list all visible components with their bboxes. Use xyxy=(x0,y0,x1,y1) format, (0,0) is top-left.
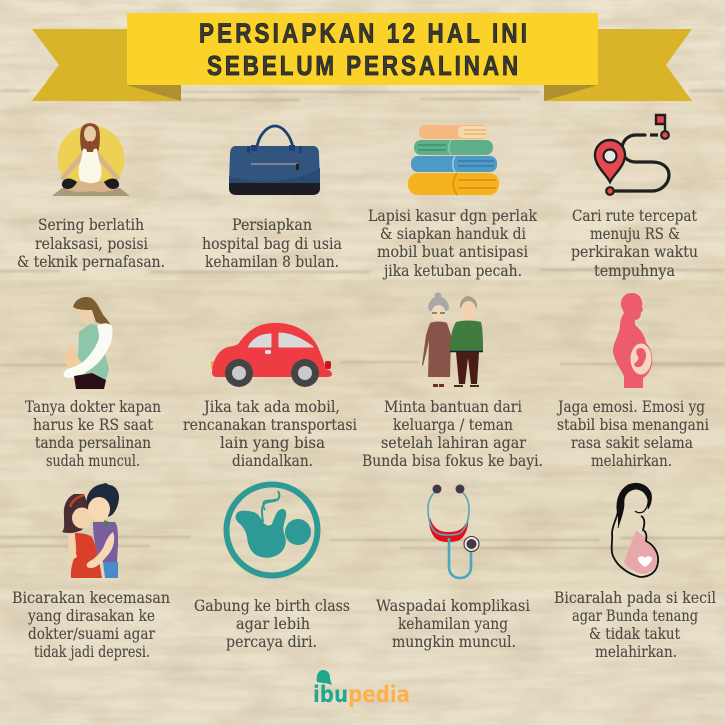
text block: Bicarakan kecemasan xyxy=(12,589,170,607)
text block: rasa sakit selama xyxy=(571,434,693,452)
text block: kehamilan 8 bulan. xyxy=(205,253,339,271)
text block: sudah muncul. xyxy=(46,452,140,470)
text block: Minta bantuan dari xyxy=(384,398,522,416)
icon: fetus in circle xyxy=(226,484,318,576)
item 11: complications xyxy=(376,484,530,651)
ribbon left tail xyxy=(32,29,181,101)
text block xyxy=(183,398,357,470)
text block: Gabung ke birth class xyxy=(194,597,350,615)
ribbon left fold xyxy=(127,85,181,101)
logo wordmark: ibupedia xyxy=(313,682,410,708)
text block: stabil bisa menangani xyxy=(557,416,709,434)
text block: Jika tak ada mobil, xyxy=(202,398,340,416)
icon: bag xyxy=(229,126,320,195)
text block: melahirkan. xyxy=(595,643,677,661)
text block: Tanya dokter kapan xyxy=(25,398,161,416)
text block xyxy=(554,589,716,661)
text block: jika ketuban pecah. xyxy=(382,262,522,280)
text block: Persiapkan xyxy=(232,216,312,234)
text block xyxy=(202,216,342,271)
text block: tanda persalinan xyxy=(35,434,151,452)
text block: kehamilan yang xyxy=(398,615,508,633)
text block: melahirkan. xyxy=(591,452,672,470)
text block: mungkin muncul. xyxy=(392,633,516,651)
item 5: ask doctor xyxy=(25,297,161,470)
item 12: talk to baby xyxy=(554,483,716,661)
icon: route map xyxy=(595,115,669,195)
text block: tempuhnya xyxy=(594,262,675,280)
text block: keluarga / teman xyxy=(393,416,513,434)
text block: harus ke RS saat xyxy=(33,416,154,434)
icon: hugging couple xyxy=(62,483,119,578)
text block: lain yang bisa xyxy=(220,434,325,452)
text block: tidak jadi depresi. xyxy=(34,643,150,661)
icon: meditating woman xyxy=(52,123,130,196)
item 6: car xyxy=(183,323,357,470)
text block xyxy=(556,398,709,470)
ribbon right fold xyxy=(544,85,598,101)
text block: & tidak takut xyxy=(589,625,681,643)
text block xyxy=(17,216,165,271)
text block xyxy=(362,398,543,470)
icon: pregnancy silhouette xyxy=(613,293,652,388)
text block: perkirakan waktu xyxy=(571,243,698,261)
title text: PERSIAPKAN 12 HAL INI xyxy=(199,18,527,49)
text block xyxy=(571,207,698,280)
text block xyxy=(376,597,530,651)
icon: pregnant woman with shawl xyxy=(64,297,113,389)
item 2: hospital bag xyxy=(202,126,342,271)
text block: dokter/suami agar xyxy=(28,625,156,643)
icon: red car xyxy=(211,323,332,387)
item 4: route xyxy=(571,115,698,280)
text block: mobil buat antisipasi xyxy=(377,243,528,261)
text block xyxy=(25,398,161,470)
text block: Lapisi kasur dgn perlak xyxy=(368,207,538,225)
item 8: emotions xyxy=(556,293,709,470)
text block: Waspadai komplikasi xyxy=(376,597,530,615)
icon: pregnant outline xyxy=(612,483,658,577)
ribbon right tail xyxy=(544,29,692,101)
item 3: towels xyxy=(368,125,538,280)
text block: menuju RS & xyxy=(590,225,680,243)
text block: diandalkan. xyxy=(232,452,313,470)
icon: stacked towels xyxy=(408,125,499,195)
text block xyxy=(12,589,170,661)
title text: SEBELUM PERSALINAN xyxy=(207,51,518,82)
text block: percaya diri. xyxy=(226,633,317,651)
icon: logo head xyxy=(317,670,332,685)
icon: stethoscope xyxy=(428,484,479,578)
text block: yang dirasakan ke xyxy=(27,607,155,625)
text block: & teknik pernafasan. xyxy=(17,253,165,271)
text block: setelah lahiran agar xyxy=(381,434,527,452)
text block xyxy=(194,597,350,651)
text block: Bunda bisa fokus ke bayi. xyxy=(362,452,543,470)
item 1: relaxation xyxy=(17,123,165,271)
ribbon main band xyxy=(127,13,598,85)
text block: agar lebih xyxy=(236,615,310,633)
title ribbon xyxy=(32,13,692,101)
text block: rencanakan transportasi xyxy=(183,416,357,434)
text block: Sering berlatih xyxy=(38,216,144,234)
text block xyxy=(368,207,538,280)
item 10: birth class xyxy=(194,484,350,651)
text block: & siapkan handuk di xyxy=(380,225,526,243)
text block: Jaga emosi. Emosi yg xyxy=(556,398,705,416)
text block: hospital bag di usia xyxy=(202,235,342,253)
text block: Cari rute tercepat xyxy=(572,207,698,225)
title text xyxy=(199,18,527,82)
item 9: talk anxiety xyxy=(12,483,170,661)
item 7: family help xyxy=(362,292,543,470)
text block: relaksasi, posisi xyxy=(35,235,148,253)
text block: agar Bunda tenang xyxy=(572,607,698,625)
icon: grandparents xyxy=(422,292,483,387)
logo: ibupedia xyxy=(313,670,410,708)
